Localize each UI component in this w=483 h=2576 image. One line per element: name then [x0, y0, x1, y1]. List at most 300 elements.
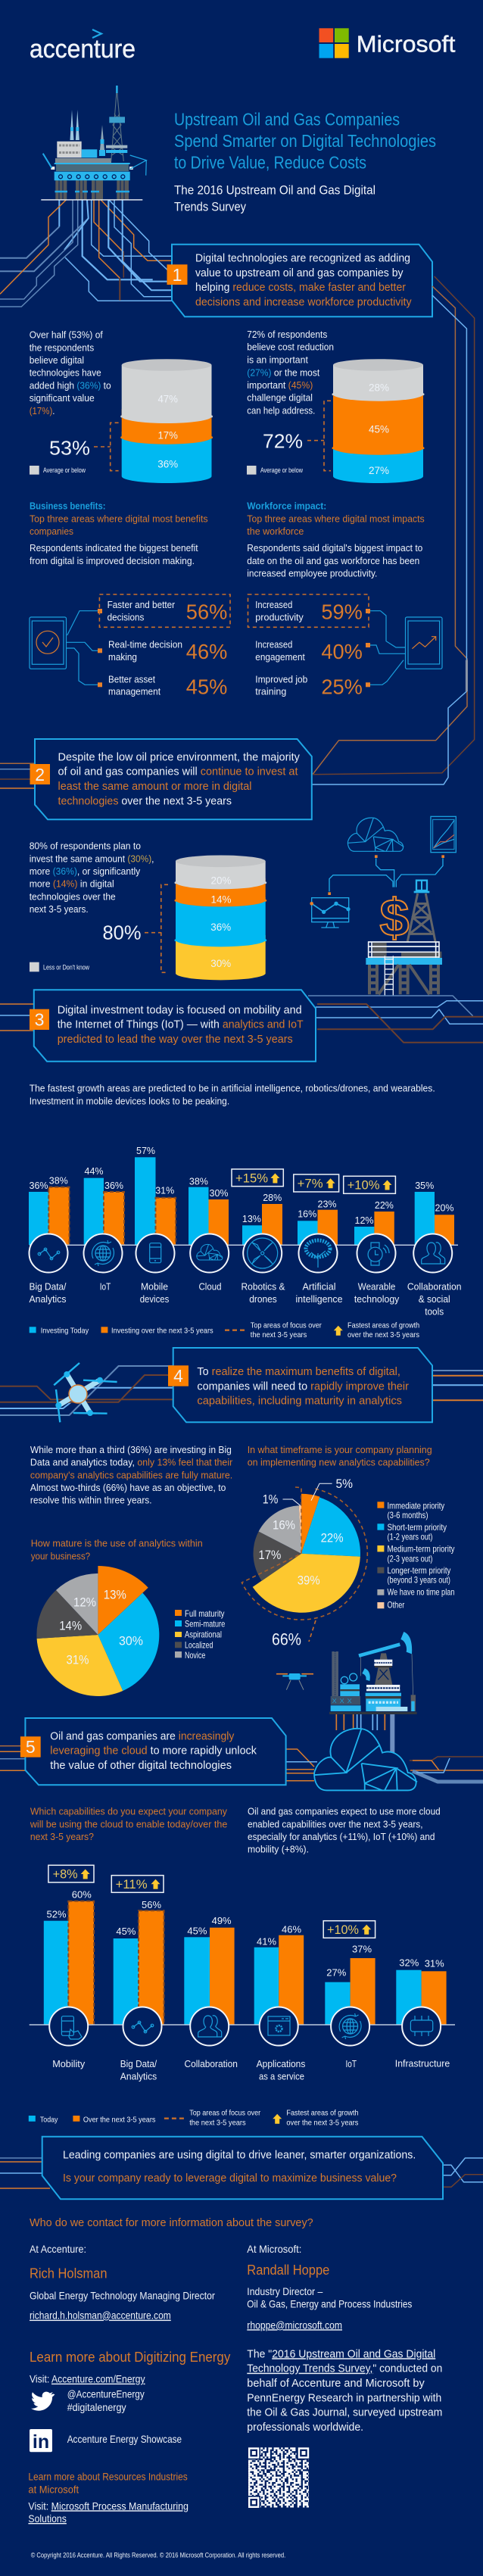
subtitle: Trends Survey [174, 199, 246, 214]
text: workforce impact: the workforce [247, 525, 304, 537]
bar value labels: 36% [29, 1180, 48, 1191]
contact: accenture: richard.h.holsman@accenture.com [30, 2309, 171, 2322]
heading: cloud capabilities question: Which capabilities do you expect your company [30, 1806, 227, 1817]
heading: timeframe question: on implementing new analytics capabilities? [248, 1457, 430, 1468]
panel: closing question: Is your company ready to leverage digital to maximize business value? [63, 2172, 397, 2185]
text: fastest growth areas: Investment in mobile devices looks to be peaking. [30, 1095, 229, 1106]
legend: maturity: Aspirational [185, 1629, 222, 1640]
finding 5 text: leveraging the cloud to more rapidly unlock [50, 1745, 257, 1757]
icon: cloud [190, 1234, 229, 1272]
bar value labels: 46% [282, 1923, 301, 1935]
contact: microsoft: Oil & Gas, Energy and Process Industries [247, 2298, 412, 2310]
growth badge: +15%: +15% [235, 1171, 268, 1186]
panel: closing question [42, 2137, 443, 2199]
pie chart: analytics maturity: 13% [104, 1588, 126, 1602]
legend: cloud chart: the next 3-5 years [189, 2119, 246, 2128]
growth badge: +7% [294, 1174, 339, 1192]
finding 2 text: of oil and gas companies will continue to invest at [58, 766, 298, 778]
legend: timeframe: (1-2 years out) [388, 1532, 433, 1542]
callout: 1 percent [263, 1492, 301, 1507]
category labels [52, 2057, 450, 2082]
icon: dollar sign: $ [380, 888, 409, 947]
text: business benefits: Business benefits: [30, 500, 106, 511]
bar chart: cloud capabilities [30, 1865, 455, 2082]
category labels: Mobile [141, 1280, 168, 1292]
finding 3 text: Digital investment today is focused on mobility and [58, 1003, 302, 1016]
legend: timeframe: We have no time plan [388, 1587, 454, 1598]
pipes from rig to box 1 [0, 200, 172, 307]
bar value labels: 27% [326, 1966, 347, 1978]
text: 80 percent plan to invest: invest the same amount (30%), [30, 853, 154, 864]
illustration: digital investment rig [310, 816, 456, 996]
panel: finding 3 [30, 990, 316, 1062]
panel: closing question: Leading companies are using digital to drive leaner, smarter organizations. [63, 2149, 416, 2162]
connector lines around closing box [0, 2158, 483, 2188]
finding 1 text: value to upstream oil and gas companies by [195, 267, 404, 279]
legend: average or below: Average or below [43, 466, 86, 475]
benefit: real-time decisions [108, 638, 227, 663]
text: survey description [247, 2347, 442, 2434]
finding 5 text: the value of other digital technologies [50, 1759, 232, 1772]
legend: cloud chart: Top areas of focus over [189, 2108, 261, 2117]
bar value labels: 28% [263, 1192, 282, 1203]
icon: collaboration people [413, 1234, 452, 1272]
callout: 66 percent [272, 1620, 316, 1649]
number 2 [30, 764, 50, 784]
legend: investment chart: Fastest areas of growth [347, 1321, 419, 1330]
icon: mobile [136, 1234, 174, 1272]
legend: investment chart: Investing Today [41, 1327, 89, 1336]
category labels: Big Data/ [29, 1280, 67, 1292]
heading: maturity question: How mature is the use of analytics within [31, 1538, 203, 1549]
bar value labels: 12% [354, 1215, 374, 1226]
callout: 1 percent: 1% [263, 1492, 278, 1507]
chart: left barrel: 36% [157, 457, 178, 469]
panel: finding 4 [168, 1348, 432, 1422]
bar value labels: 22% [375, 1199, 394, 1211]
text: 72 percent cost reduction: (27%) or the most [247, 366, 320, 378]
category labels: & social [419, 1293, 450, 1305]
legend: cloud chart: Over the next 3-5 years [83, 2115, 156, 2124]
text: analytics maturity: company's analytics capabilities are fully mature. [30, 1469, 232, 1480]
chart: right barrel [332, 359, 424, 483]
icon: tablet with chart [366, 609, 442, 687]
number 1: 1 [173, 265, 182, 285]
text: 53 percent value: (17%). [30, 405, 55, 416]
impact: engagement: 40% [321, 640, 363, 663]
title: Upstream Oil and Gas Companies [174, 110, 400, 129]
pie chart: analytics maturity: 14% [59, 1619, 82, 1633]
finding 1 text [195, 252, 412, 308]
icon: artificial intelligence [298, 1234, 338, 1272]
number 5 [20, 1736, 41, 1757]
pipes on right edge [312, 276, 475, 784]
finding 3 text: the Internet of Things (IoT) — with analytics and IoT [58, 1018, 304, 1031]
chart: investment barrel: 30% [210, 957, 231, 969]
bar value labels: 31% [425, 1958, 444, 1969]
finding 4 text: capabilities, including maturity in analytics [197, 1395, 402, 1408]
text: survey description: The "2016 Upstream Oil and Gas Digital [247, 2347, 435, 2360]
impact: engagement: Increased [255, 638, 292, 650]
finding 4 text: companies will need to rapidly improve their [197, 1380, 409, 1392]
icon: offshore oil rig [41, 86, 146, 201]
copyright: © Copyright 2016 Accenture. All Rights Reserved. © 2016 Microsoft Corporation. All rights reserved. [31, 2551, 285, 2559]
legend: cloud chart: over the next 3-5 years [286, 2119, 358, 2128]
benefit: asset management: Better asset [108, 674, 155, 685]
benefit: asset management: management [108, 686, 160, 697]
category labels: Analytics [29, 1293, 67, 1305]
contact: microsoft: Industry Director – [247, 2285, 323, 2297]
text: business benefits: companies [30, 525, 73, 537]
category labels: IoT [345, 2058, 357, 2069]
category labels: tools [425, 1306, 444, 1318]
callout: 5 percent [311, 1477, 353, 1501]
impact: engagement [255, 638, 363, 663]
finding 2 text: technologies over the next 3-5 years [58, 794, 232, 807]
impact: productivity [255, 599, 363, 623]
heading: maturity question [31, 1538, 203, 1561]
benefit: faster decisions [108, 599, 227, 623]
text: 80 percent plan to invest: more (36%), or significantly [30, 865, 141, 877]
text: 72 percent cost reduction [247, 329, 334, 416]
impact: engagement: engagement [255, 651, 305, 663]
callout: 72 percent [263, 401, 331, 471]
bar value labels: 45% [187, 1925, 207, 1936]
text: survey description: PennEnergy Research in partnership with [247, 2391, 441, 2404]
chart: right barrel: 45% [369, 423, 389, 435]
contact: accenture: Global Energy Technology Managing Director [30, 2290, 215, 2302]
pie chart: implementation timeframe [242, 1477, 367, 1649]
text: 53 percent value: believe digital [30, 354, 84, 366]
panel: finding 1 [167, 245, 432, 317]
category labels: technology [354, 1293, 400, 1305]
growth badge: +10% [323, 1921, 375, 1938]
category labels [29, 1280, 462, 1318]
legend: timeframe: Longer-term priority [388, 1565, 450, 1576]
category labels: as a service [259, 2071, 304, 2082]
impact: job training: Improved job [255, 674, 307, 685]
chart: right barrel: 27% [369, 464, 389, 476]
learn more: resources industries: Learn more about Resources Industries [28, 2471, 188, 2483]
text: business benefits: from digital is improved decision making. [30, 555, 195, 566]
text: fastest growth areas: The fastest growth areas are predicted to be in artificial intelligence, robotics/drones, and wearables. [30, 1083, 435, 1094]
bar chart: digital investment today vs next 3-5 years [29, 1145, 462, 1318]
pie chart: analytics maturity: 12% [73, 1595, 96, 1610]
legend: timeframe: (beyond 3 years out) [388, 1575, 450, 1586]
learn more: resources industries: Visit: Microsoft Process Manufacturing [28, 2500, 189, 2512]
benefit: faster decisions: Faster and better [108, 599, 176, 610]
growth badge: +11%: +11% [116, 1877, 148, 1891]
learn more: resources industries: at Microsoft [28, 2483, 79, 2495]
contact: accenture: Rich Holsman [30, 2266, 108, 2281]
callout: 80 percent [103, 884, 168, 972]
growth badge: +10%: +10% [327, 1923, 359, 1937]
bar value labels: 56% [142, 1899, 161, 1910]
text: workforce impact: Workforce impact: [247, 500, 326, 511]
legend: less or don't know [30, 962, 89, 971]
category labels: Applications [257, 2058, 306, 2069]
icon: linkedin: in [33, 2431, 49, 2453]
number 4 [168, 1365, 189, 1386]
microsoft logo: Microsoft [357, 30, 456, 57]
icon: tablet with check [30, 609, 102, 687]
legend: investment chart: Investing over the next 3-5 years [111, 1327, 213, 1336]
bar value labels: 38% [189, 1175, 208, 1187]
finding 1 text: decisions and increase workforce productivity [195, 295, 412, 308]
legend: maturity [175, 1608, 226, 1661]
pie chart: implementation timeframe: 16% [273, 1517, 295, 1532]
chart: investment barrel: 14% [210, 893, 232, 905]
icon: big data [29, 1234, 68, 1272]
category labels: Artificial [303, 1280, 336, 1292]
text: twitter handles: #digitalenergy [67, 2401, 126, 2413]
chart: investment barrel: 36% [210, 921, 231, 933]
connector lines left of box 2 [0, 763, 35, 788]
legend: average or below [247, 466, 303, 475]
chart: investment barrel [174, 856, 266, 980]
text: 80 percent plan to invest: more (14%) in digital [30, 878, 114, 890]
number 4: 4 [173, 1366, 183, 1386]
bar value labels: 23% [318, 1198, 337, 1209]
icon: iot globe [83, 1234, 123, 1272]
text: workforce impact [247, 500, 425, 579]
callout: 66 percent: 66% [272, 1630, 301, 1649]
benefit: real-time decisions: making [108, 651, 137, 663]
text: cloud expectations: enabled capabilities over the next 3-5 years, [248, 1818, 422, 1829]
impact: job training: 25% [321, 675, 363, 699]
finding 4 text [197, 1365, 409, 1408]
finding 5 text [50, 1729, 257, 1772]
learn more: digitizing energy [30, 2350, 230, 2453]
text: 72 percent cost reduction: believe cost reduction [247, 341, 334, 353]
text: workforce impact: increased employee productivity. [247, 568, 377, 579]
contact: accenture: At Accenture: [30, 2243, 86, 2255]
text: 72 percent cost reduction: is an important [247, 354, 308, 365]
derrick [407, 881, 435, 941]
icon: cloud [347, 818, 404, 851]
finding 1 text: helping reduce costs, make faster and better [195, 281, 406, 294]
category labels: Analytics [120, 2071, 157, 2082]
bar value labels: 38% [49, 1174, 68, 1186]
impact: productivity: 59% [321, 600, 363, 623]
icon: collaboration [190, 2007, 229, 2046]
pie chart: analytics maturity [36, 1566, 159, 1696]
connector lines around box 4 [0, 1366, 483, 1415]
benefits list [99, 594, 230, 699]
finding 3 text: predicted to lead the way over the next 3-5 years [58, 1033, 293, 1046]
category labels: intelligence [295, 1293, 342, 1305]
legend: cloud chart: Today [40, 2115, 58, 2124]
learn more: digitizing energy: Learn more about Digitizing Energy [30, 2350, 230, 2365]
pie chart: analytics maturity: 30% [119, 1634, 143, 1648]
microsoft logo [319, 28, 456, 58]
text: 53 percent value: added high (36%) to [30, 379, 111, 391]
chart: left barrel: 17% [157, 429, 178, 441]
legend: maturity: Semi-mature [185, 1619, 226, 1629]
chart: left barrel [120, 359, 213, 483]
growth badge: +10% [344, 1176, 395, 1193]
impact: productivity: productivity [255, 612, 304, 623]
icon: iot globe [331, 2007, 369, 2046]
finding 2 text [58, 750, 300, 807]
workforce list [248, 594, 369, 699]
benefit: asset management [108, 674, 227, 699]
heading: cloud capabilities question: next 3-5 years? [30, 1831, 94, 1842]
bar value labels: 35% [415, 1180, 435, 1191]
icon: twitter [31, 2392, 55, 2411]
pie chart: analytics maturity: 31% [67, 1653, 89, 1667]
platform [366, 941, 442, 996]
text: 80 percent plan to invest [30, 840, 154, 915]
contact: microsoft: Randall Hoppe [247, 2263, 329, 2278]
icon: robotics drone [243, 1234, 282, 1272]
growth badge: +8% [48, 1865, 94, 1882]
legend: timeframe: Short-term priority [388, 1522, 447, 1533]
bar value labels: 49% [212, 1915, 232, 1926]
icon: drone [54, 1363, 117, 1422]
text: survey description: Technology Trends Survey," conducted on [247, 2362, 442, 2375]
text: 53 percent value: the respondents [30, 341, 95, 353]
growth badge: +10%: +10% [347, 1178, 380, 1193]
number 3: 3 [35, 1010, 44, 1030]
number 3 [30, 1009, 49, 1030]
legend: timeframe: (3-6 months) [388, 1510, 428, 1520]
category labels: Robotics & [241, 1280, 285, 1292]
bar value labels: 44% [85, 1165, 104, 1177]
finding 2 text: Despite the low oil price environment, the majority [58, 750, 300, 763]
text: twitter handles: @AccentureEnergy [67, 2388, 145, 2400]
text: 80 percent plan to invest: 80% of respondents plan to [30, 840, 141, 852]
chart: investment barrel: 20% [210, 875, 232, 887]
text: workforce impact: Respondents said digital's biggest impact to [247, 542, 422, 554]
text: workforce impact: date on the oil and gas workforce has been [247, 555, 419, 566]
icon: applications window [260, 2007, 298, 2046]
icon: linkedin [30, 2429, 52, 2453]
text: business benefits: Top three areas where digital most benefits [30, 513, 208, 524]
callout: 53 percent [49, 423, 119, 471]
learn more: digitizing energy: Visit: Accenture.com/Energy [30, 2373, 145, 2385]
category labels: Infrastructure [395, 2057, 450, 2069]
number 1 [167, 264, 188, 285]
text: 80 percent plan to invest: technologies over the [30, 890, 116, 902]
category labels: Mobility [52, 2058, 86, 2069]
bars [29, 1157, 458, 1246]
bars [30, 1901, 455, 2026]
bar value labels: 52% [47, 1908, 67, 1920]
text: survey description: behalf of Accenture and Microsoft by [247, 2377, 425, 2390]
finding 5 text: Oil and gas companies are increasingly [50, 1729, 235, 1742]
title: Spend Smarter on Digital Technologies [174, 131, 436, 151]
category labels: Wearable [358, 1280, 395, 1292]
text: analytics maturity: Almost two-thirds (66%) have as an objective, to [30, 1482, 226, 1493]
bar value labels: 45% [116, 1926, 136, 1937]
text: analytics maturity [30, 1444, 233, 1506]
text: business benefits: Respondents indicated the biggest benefit [30, 542, 198, 554]
legend: cloud chart: Fastest areas of growth [286, 2108, 359, 2117]
text: business benefits [30, 500, 208, 566]
benefit: real-time decisions: Real-time decision [108, 638, 182, 650]
legend: timeframe: Other [388, 1599, 404, 1610]
legend: maturity: Novice [185, 1650, 206, 1661]
learn more: resources industries: Solutions [28, 2512, 67, 2525]
heading: maturity question: your business? [31, 1550, 90, 1561]
bar value labels: 57% [136, 1145, 155, 1156]
legend: investment chart: the next 3-5 years [251, 1330, 307, 1339]
subtitle: The 2016 Upstream Oil and Gas Digital [174, 183, 375, 198]
bar value labels: 37% [352, 1943, 372, 1954]
text: 72 percent cost reduction: important (45%) [247, 379, 313, 391]
legend: timeframe: Medium-term priority [388, 1544, 454, 1555]
heading: timeframe question [248, 1444, 432, 1468]
category labels: Collaboration [407, 1280, 462, 1292]
panel: finding 5 [20, 1718, 286, 1785]
number 5: 5 [26, 1737, 36, 1757]
text: analytics maturity: resolve this within three years. [30, 1495, 152, 1506]
bar value labels [47, 1889, 444, 1978]
qr code [248, 2447, 309, 2509]
icon: big data [123, 2007, 162, 2046]
impact: job training [255, 674, 363, 699]
legend: timeframe [377, 1500, 454, 1610]
text: survey description: the Oil & Gas Journal, surveyed upstream [247, 2406, 442, 2419]
category labels: devices [140, 1293, 170, 1305]
bar value labels: 32% [399, 1957, 419, 1969]
bar value labels: 30% [209, 1187, 229, 1199]
chart: left barrel: 47% [157, 393, 178, 405]
text: workforce impact: Top three areas where digital most impacts [247, 513, 425, 524]
heading: cloud capabilities question: will be using the cloud to enable today/over the [30, 1818, 227, 1829]
title [174, 110, 436, 172]
pie chart: implementation timeframe: 39% [298, 1573, 320, 1588]
bar value labels: 20% [435, 1202, 454, 1213]
impact: job training: training [255, 686, 286, 697]
pie chart: implementation timeframe: 17% [258, 1548, 281, 1562]
heading: cloud capabilities question [30, 1806, 227, 1842]
icon: monitor chart [310, 898, 350, 928]
highlight box: top impact [248, 594, 369, 627]
legend: average or below: Average or below [260, 466, 303, 475]
contact: microsoft [247, 2243, 412, 2331]
text: 72 percent cost reduction: can help address. [247, 404, 315, 416]
bar value labels: 31% [155, 1185, 175, 1196]
text: linkedin: Accenture Energy Showcase [67, 2433, 182, 2445]
finding 4 text: To realize the maximum benefits of digital, [197, 1365, 400, 1378]
callout: 5 percent: 5% [336, 1477, 353, 1491]
chart: right barrel: 28% [369, 382, 389, 394]
category labels: Big Data/ [120, 2058, 157, 2069]
benefit: real-time decisions: 46% [186, 640, 227, 663]
category labels: drones [249, 1293, 277, 1305]
legend: investment chart: over the next 3-5 years [347, 1330, 419, 1339]
bar value labels: 41% [257, 1935, 276, 1947]
legend: average or below [30, 466, 86, 475]
legend: investment chart [30, 1321, 419, 1339]
finding 3 text [58, 1003, 304, 1046]
text: 53 percent value [30, 329, 111, 416]
category labels: Collaboration [185, 2058, 238, 2069]
heading: contact: Who do we contact for more information about the survey? [30, 2216, 313, 2229]
number 2: 2 [35, 765, 45, 784]
icon: wearable watch [357, 1234, 395, 1272]
bar value labels [29, 1145, 454, 1226]
text: analytics maturity: While more than a third (36%) are investing in Big [30, 1444, 232, 1455]
legend: cloud chart [29, 2108, 359, 2128]
growth badge: +8%: +8% [53, 1867, 78, 1882]
text: 72 percent cost reduction: challenge digital [247, 392, 313, 404]
text: 72 percent cost reduction: 72% of respondents [247, 329, 328, 340]
text: cloud expectations: mobility (+8%). [248, 1844, 309, 1855]
text: 53 percent value: significant value [30, 392, 95, 404]
